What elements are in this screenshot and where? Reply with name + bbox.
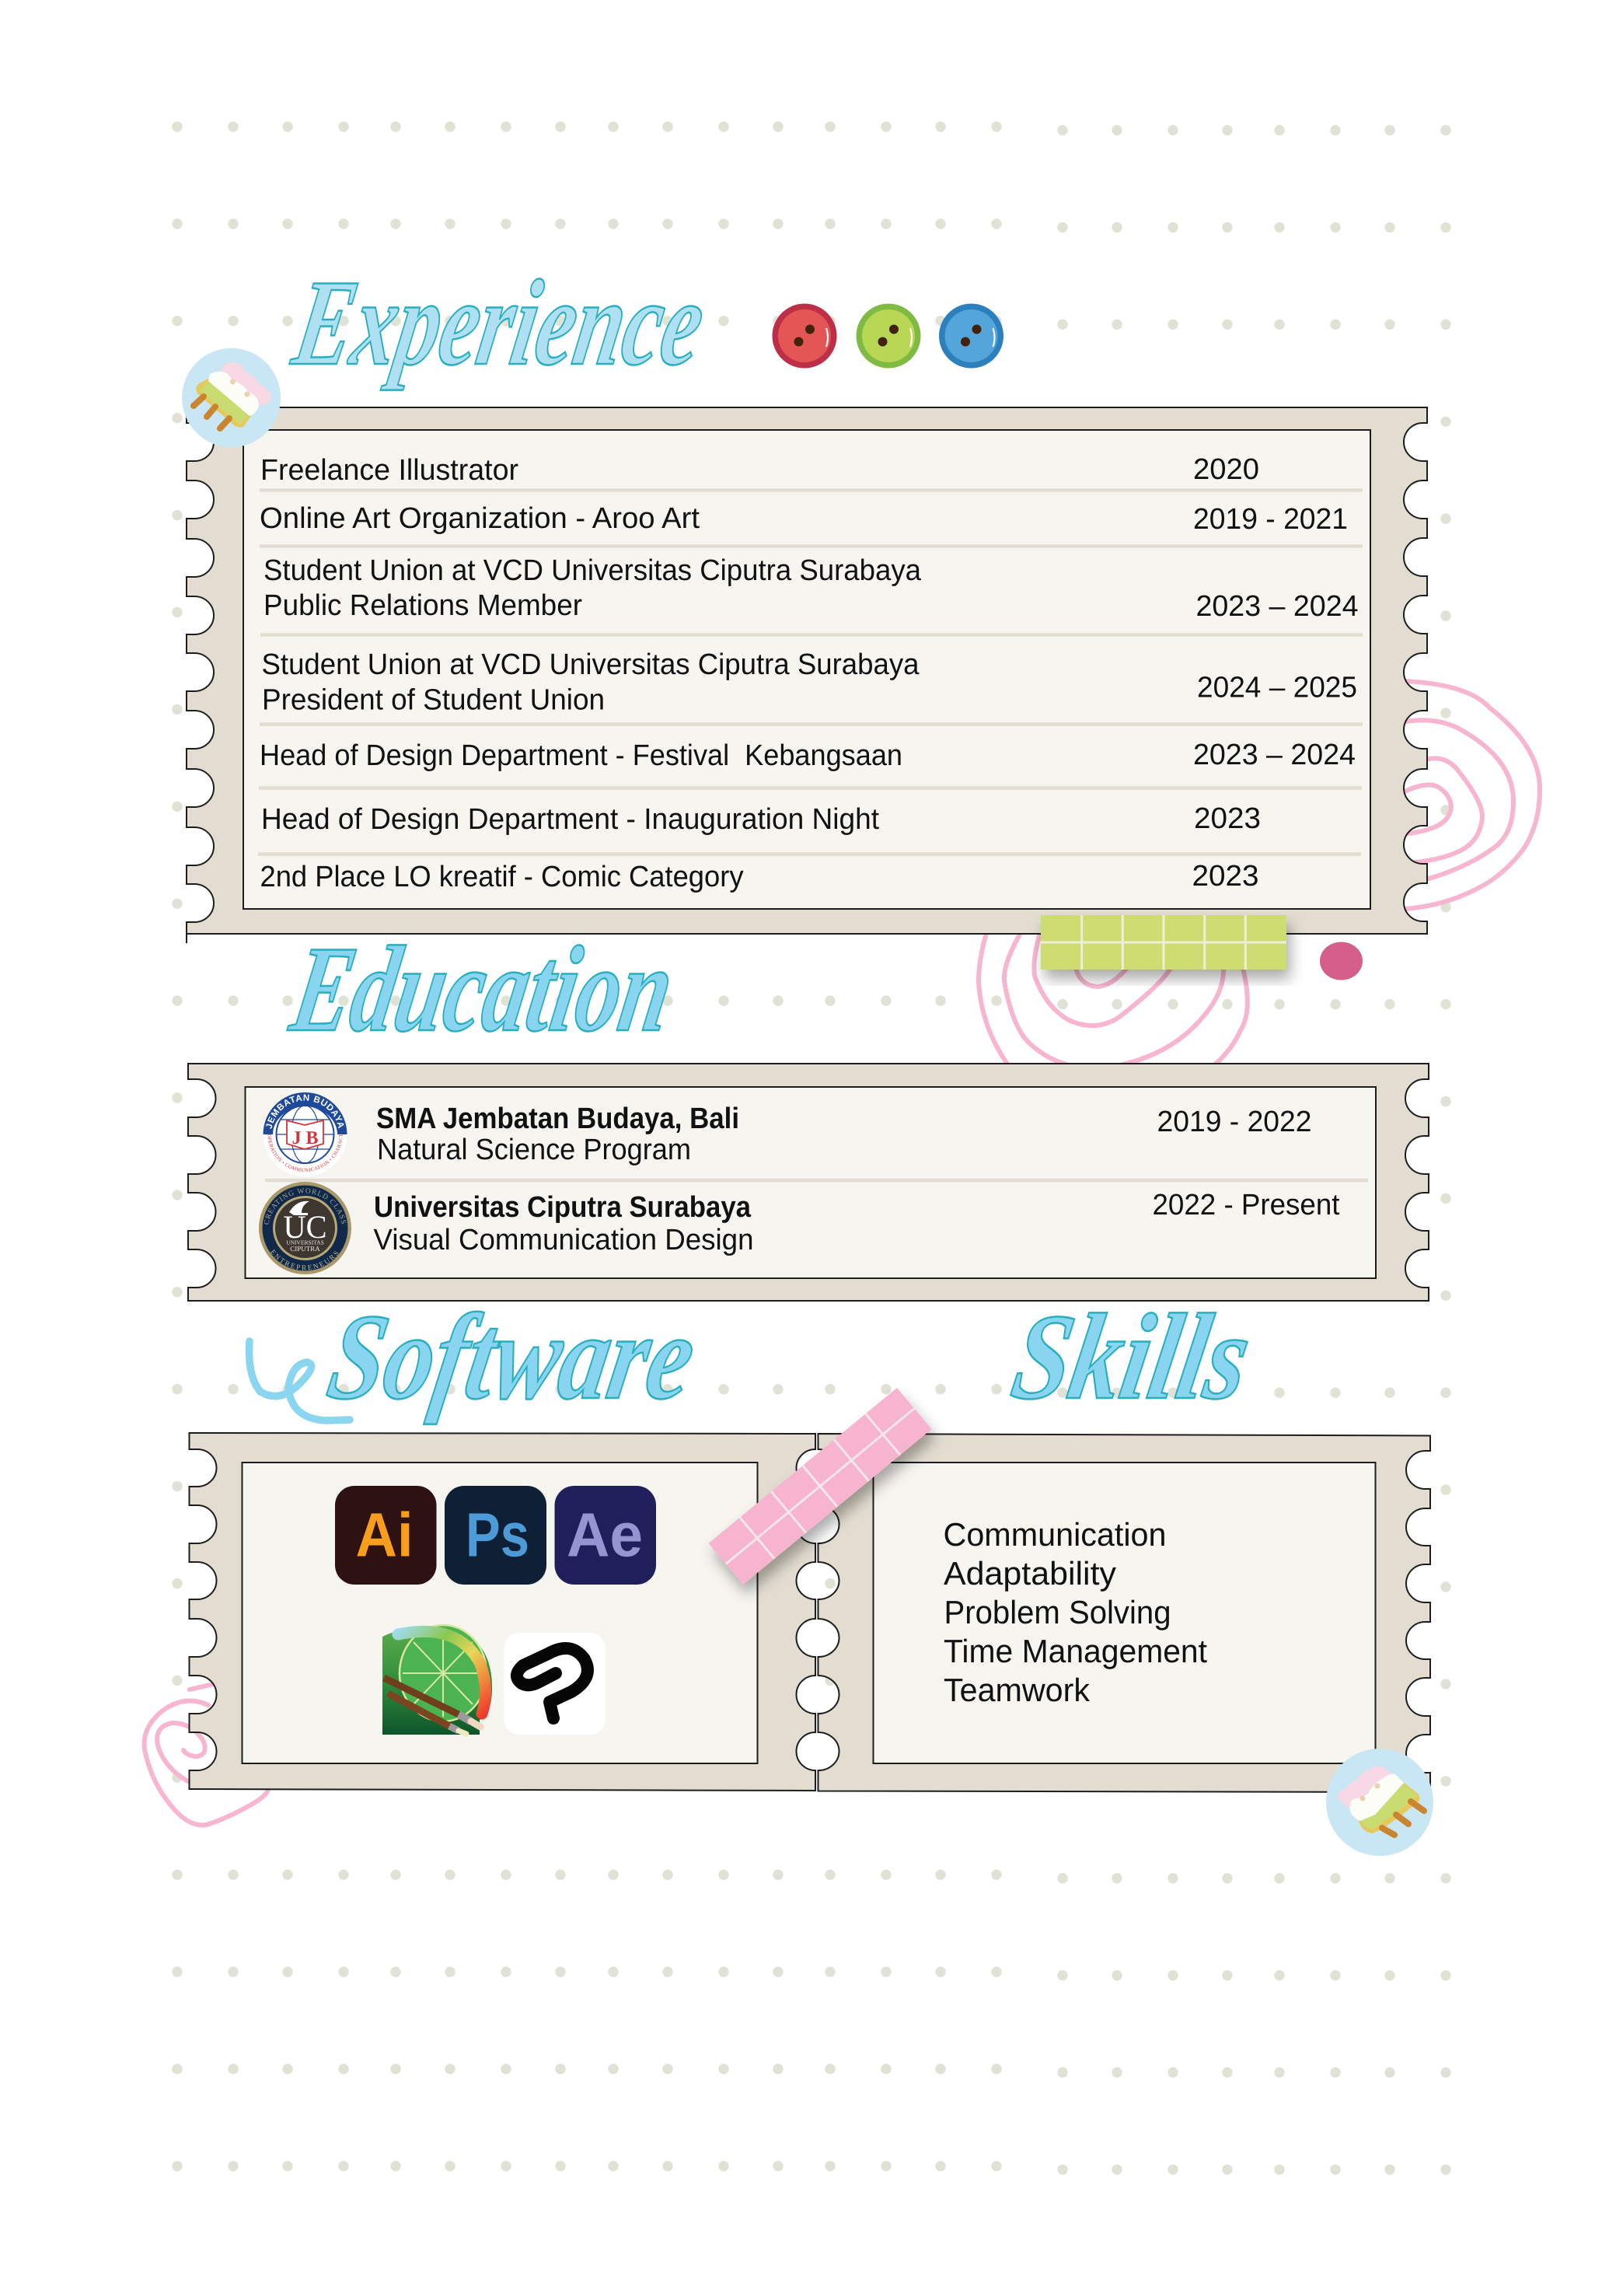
logo: Universitas Ciputra (259, 1182, 351, 1274)
row: Festival Kebangsaan: Head of Design Department - Festival Kebangsaan (260, 739, 902, 772)
button: green (857, 303, 920, 369)
icon: Adobe Illustrator (335, 1486, 437, 1585)
row: Freelance Illustrator (260, 453, 1259, 487)
row: President of Student Union: President of Student Union (262, 684, 605, 717)
button: red (773, 303, 836, 369)
panel: education (187, 1063, 1429, 1302)
entry: SMA Jembatan Budaya: SMA Jembatan Budaya, Bali (376, 1103, 739, 1135)
row: Public Relations Member: 2023 – 2024 (1195, 590, 1359, 623)
icon: Adobe After Effects: Ae (567, 1501, 643, 1569)
logo: SMA Jembatan Budaya: J B (291, 1128, 319, 1148)
entry: Universitas Ciputra Surabaya: Visual Communication Design (373, 1224, 754, 1256)
icon: Adobe Illustrator: Ai (356, 1501, 414, 1569)
badge: popsicle top left (182, 348, 281, 447)
green washi tape (1041, 915, 1286, 970)
logo: SMA Jembatan Budaya: JEMBATAN BUDAYA (266, 1095, 344, 1129)
logo: Universitas Ciputra: ENTREPRENEURS (270, 1249, 339, 1270)
pink swirl: bottom left (145, 1684, 268, 1825)
icon: Clip Studio (504, 1633, 606, 1735)
logo: Universitas Ciputra: CIPUTRA (290, 1245, 320, 1253)
skills list: Teamwork (944, 1672, 1091, 1708)
button: blue (939, 303, 1003, 369)
icon: Adobe Photoshop (445, 1486, 546, 1585)
icon: Adobe Photoshop: Ps (466, 1501, 529, 1569)
row: President of Student Union: Student Union at VCD Universitas Ciputra Surabaya (261, 648, 920, 681)
panel: software (190, 1433, 815, 1791)
skills list: Communication (944, 1516, 1166, 1553)
panel: experience (187, 407, 1427, 943)
skills list: Time Management (944, 1633, 1207, 1669)
logo: Universitas Ciputra: UC (283, 1210, 326, 1246)
badge: popsicle bottom right (1326, 1749, 1433, 1856)
logo: Universitas Ciputra: CREATING WORLD CLASS (264, 1188, 347, 1225)
decorative curl beside Software heading (250, 1341, 350, 1421)
row: Inauguration Night: Head of Design Department - Inauguration Night (261, 803, 879, 836)
panel: skills (818, 1434, 1430, 1792)
pink washi tape (709, 1388, 931, 1585)
row: Comic Category (260, 860, 1259, 893)
heading: Experience: Experience (284, 255, 714, 391)
row: Online Art Organization: 2019 - 2021 (1193, 503, 1348, 536)
entry: Universitas Ciputra Surabaya: Universitas Ciputra Surabaya (374, 1191, 752, 1224)
entry: Universitas Ciputra Surabaya: 2022 - Present (1152, 1189, 1340, 1221)
icon: paint tool (382, 1625, 492, 1735)
row: Public Relations Member: Student Union at VCD Universitas Ciputra Surabaya (264, 554, 922, 587)
row: President of Student Union: 2024 – 2025 (1197, 672, 1357, 704)
heading: Software: Software (319, 1289, 705, 1425)
row: Online Art Organization (260, 502, 1348, 536)
entry: SMA Jembatan Budaya (376, 1103, 1312, 1166)
row: Freelance Illustrator: Freelance Illustrator (260, 454, 518, 487)
row: Inauguration Night (261, 802, 1261, 836)
skills list: Problem Solving (944, 1594, 1171, 1630)
logo: Universitas Ciputra: UNIVERSITAS (286, 1239, 324, 1246)
row: Comic Category: 2023 (1192, 860, 1259, 893)
row: Public Relations Member: Public Relations Member (264, 589, 582, 622)
icon: Adobe After Effects (555, 1486, 656, 1585)
row: Festival Kebangsaan (260, 739, 1356, 772)
row: Freelance Illustrator: 2020 (1193, 453, 1259, 486)
entry: SMA Jembatan Budaya: 2019 - 2022 (1157, 1106, 1312, 1138)
heading: Education: Education (281, 921, 683, 1057)
row: Comic Category: 2nd Place LO kreatif - Comic Category (260, 861, 743, 893)
pink dot (1320, 942, 1363, 980)
row: Public Relations Member (264, 554, 1359, 623)
row: President of Student Union (261, 648, 1357, 717)
row: Inauguration Night: 2023 (1194, 802, 1261, 835)
entry: Universitas Ciputra Surabaya (373, 1189, 1340, 1256)
heading: Skills: Skills (1003, 1289, 1260, 1425)
logo: SMA Jembatan Budaya: COOPERATION • COMMUNICATION • CHARACTER (267, 1134, 342, 1172)
skills list (944, 1516, 1207, 1708)
pink swirl: right of experience panel (1405, 681, 1540, 909)
row: Festival Kebangsaan: 2023 – 2024 (1193, 739, 1356, 771)
pink swirl: below experience panel (979, 933, 1248, 1065)
entry: SMA Jembatan Budaya: Natural Science Program (377, 1134, 691, 1166)
logo: SMA Jembatan Budaya (263, 1092, 347, 1176)
row: Online Art Organization: Online Art Organization - Aroo Art (260, 502, 700, 535)
skills list: Adaptability (944, 1555, 1116, 1592)
